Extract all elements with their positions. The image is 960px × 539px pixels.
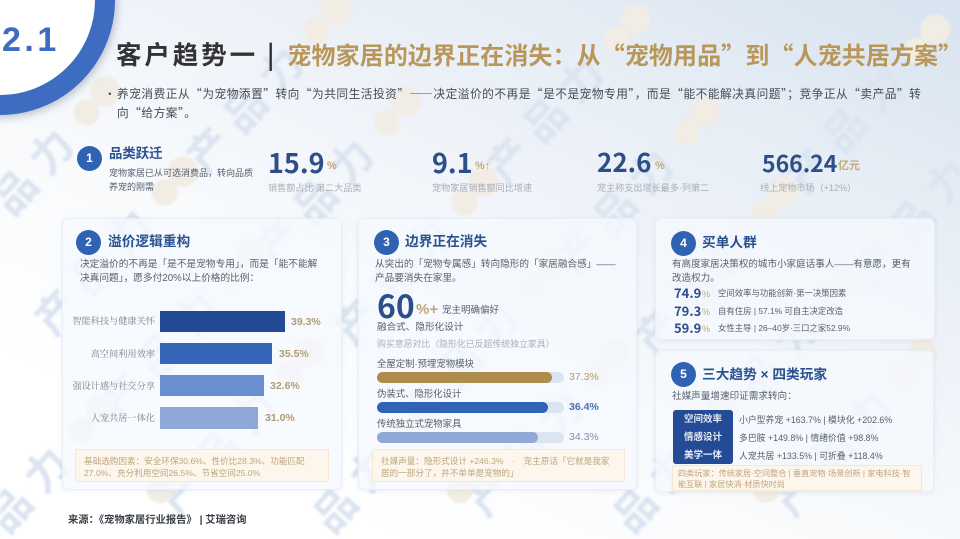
panel 2: premium logic (62, 218, 342, 490)
badge 2: 2 (85, 235, 92, 249)
callout 2 (75, 449, 329, 482)
description 4 (672, 258, 911, 284)
description 1: 养宠的刚需 (109, 182, 154, 192)
buyer stats: 79.3 (674, 301, 701, 320)
source note: 来源：《宠物家居行业报告》 | 艾瑞咨询 (68, 515, 246, 526)
buyer stats: % (702, 324, 710, 334)
heading 2: 溢价逻辑重构 (108, 234, 190, 249)
heading 3: 边界正在消失 (405, 234, 487, 249)
description 4: 有高度家居决策权的城市小家庭话事人——有意愿，更有 (672, 259, 911, 270)
callout 3 (372, 449, 625, 482)
intro bullet text: 养宠消费正从“为宠物添置”转向“为共同生活投资”——决定溢价的不再是“是不是宠物专用”，而是“能不能解决真问题”；竞争正从“卖产品”转 (117, 85, 921, 102)
stat 22.6%: 22.6 (597, 143, 651, 180)
badge 1 (77, 146, 102, 171)
bar chart: 39.3% (291, 316, 321, 328)
bar chart: 高空间利用效率 (91, 349, 155, 359)
watermark pattern: 产品力 (143, 366, 297, 527)
trend table (673, 410, 892, 464)
description 3: 产品要消失在家里。 (375, 273, 462, 284)
stat 15.9%: % (327, 160, 337, 172)
caption 3: 购买意愿对比（隐形化已反超传统独立家具） (377, 339, 554, 349)
stat 9.1%: %↑ (475, 160, 490, 172)
callout 3: 居的一部分了，并不单单是宠物的」 (381, 468, 519, 478)
trend table: 多巴胺 +149.8% | 情绪价值 +98.8% (739, 433, 878, 443)
description 4: 改造权力。 (672, 273, 720, 284)
big stat 60%: 60 (377, 282, 415, 328)
description 1: 宠物家居已从可选消费品，转向品质 (109, 168, 253, 178)
stat 9.1% (432, 142, 532, 193)
stat 22.6%: % (655, 160, 665, 172)
stat 15.9% (268, 142, 361, 193)
bar chart: 31.0% (265, 412, 295, 424)
buyer stats: 空间效率与功能创新·第一决策因素 (718, 288, 846, 298)
callout 5 (672, 465, 922, 491)
progress bars: 34.3% (569, 431, 599, 443)
panel 5: trends and players (655, 350, 934, 492)
bar chart: 32.6% (270, 380, 300, 392)
badge 4 (671, 231, 696, 256)
trend table: 人宠共居 +133.5% | 可折叠 +118.4% (739, 451, 883, 461)
title: 客户趋势一 | 宠物家居的边界正在消失：从“宠物用品”到“人宠共居方案” (116, 35, 960, 72)
section number: 2.1 (2, 21, 60, 59)
bar chart: 强设计感与社交分享 (72, 381, 155, 391)
callout 5: 能互联 | 家居快消·材质快时尚 (678, 480, 785, 489)
badge 1: 1 (86, 151, 93, 165)
description 2: 决定溢价的不再是「是不是宠物专用」，而是「能不能解 (80, 259, 317, 270)
watermark pattern: 产品力 (85, 268, 239, 429)
buyer stats: 59.9 (674, 318, 701, 337)
big stat 60%: 宠主明确偏好 (442, 305, 499, 316)
watermark pattern: 产品力 (450, 366, 604, 527)
badge 4: 4 (680, 236, 687, 250)
progress bars: 传统独立式宠物家具 (377, 418, 461, 429)
watermark pattern: 产品力 (385, 278, 539, 439)
callout 2: 基础选购因素：安全环保30.6%、性价比28.3%、功能匹配 (84, 456, 305, 466)
buyer stats: % (702, 289, 710, 299)
callout 5: 四类玩家：传统家居·空间整合 | 垂直宠物·场景创新 | 家电科技·智 (678, 469, 911, 478)
watermark pattern: 产品力 (470, 33, 624, 194)
watermark pattern: 产品力 (770, 43, 924, 204)
progress bars: 37.3% (569, 371, 599, 383)
description 2: 决真问题」，愿多付20%以上价格的比例： (80, 273, 259, 284)
bar chart: 人宠共居一体化 (91, 413, 155, 423)
big stat 60%: %+ (416, 301, 438, 318)
trend table: 小户型养宠 +163.7% | 模块化 +202.6% (739, 415, 892, 425)
stat 9.1%: 9.1 (432, 142, 473, 181)
panel 3: boundary vanishing (358, 218, 637, 490)
watermark pattern: 产品力 (170, 23, 324, 184)
stat 566.24: 566.24 (762, 145, 837, 179)
watermark pattern: 产品力 (757, 366, 911, 527)
bar chart (72, 311, 321, 429)
description 2 (80, 258, 317, 284)
big stat 60% (377, 282, 499, 328)
intro bullet text (104, 85, 921, 121)
callout 2: 27.0%、充分利用空间26.5%、节省空间25.0% (84, 468, 260, 478)
callout 3: 社媒声量：隐形式设计 +246.3% · 宠主原话「它就是我家 (381, 456, 609, 466)
badge 2 (76, 230, 101, 255)
bar chart: 智能科技与健康关怀 (72, 316, 155, 326)
badge 3: 3 (383, 235, 390, 249)
stat 15.9%: 销售额占比 第二大品类 (268, 183, 361, 193)
sub text 3: 融合式、隐形化设计 (377, 322, 463, 333)
buyer stats: 74.9 (674, 283, 701, 302)
watermark pattern: 产品力 (618, 205, 772, 366)
badge 5: 5 (680, 367, 687, 381)
badge 5 (671, 362, 696, 387)
heading 5: 三大趋势 × 四类玩家 (702, 367, 827, 382)
stat 566.24 (760, 145, 860, 193)
panel 1: category shift (77, 142, 860, 193)
watermark pattern: 产品力 (540, 125, 694, 286)
stat 22.6% (597, 143, 709, 193)
stat 22.6%: 宠主称支出增长最多·列第二 (597, 183, 709, 193)
watermark pattern: 产品力 (318, 195, 472, 356)
buyer stats (674, 283, 850, 337)
progress bars: 36.4% (569, 401, 599, 413)
watermark pattern: 产品力 (240, 115, 394, 276)
badge 3 (374, 230, 399, 255)
stat 15.9%: 15.9 (268, 142, 325, 181)
description 3 (375, 258, 616, 284)
progress bars (377, 358, 599, 443)
progress bars: 全屋定制·预埋宠物模块 (377, 358, 474, 369)
stat 566.24: 亿元 (838, 160, 860, 172)
description 1 (109, 168, 253, 192)
stat 9.1%: 宠物家居销售额同比增速 (432, 183, 532, 193)
trend table: 美学一体 (684, 450, 722, 461)
trend table: 情感设计 (684, 432, 722, 443)
intro bullet text: 向“给方案”。 (117, 104, 196, 121)
trend table: 空间效率 (684, 414, 722, 425)
heading 1: 品类跃迁 (109, 146, 163, 161)
buyer stats: % (702, 307, 710, 317)
description 5: 社媒声量增速印证需求转向： (672, 391, 797, 402)
intro bullet text: • (104, 85, 116, 102)
heading 4: 买单人群 (702, 235, 757, 250)
stat 566.24: 线上宠物市场（+12%） (760, 183, 856, 193)
section number ring (0, 0, 115, 115)
description 3: 从突出的「宠物专属感」转向隐形的「家居融合感」—— (375, 259, 616, 270)
buyer stats: 自有住房 | 57.1% 可自主决定改造 (718, 306, 843, 316)
panel 4: buyers (655, 218, 935, 340)
watermark pattern: 产品力 (18, 185, 172, 346)
buyer stats: 女性主导 | 26–40岁·三口之家52.9% (718, 323, 850, 333)
bar chart: 35.5% (279, 348, 309, 360)
watermark pattern: 产品力 (685, 288, 839, 449)
progress bars: 伪装式、隐形化设计 (377, 388, 461, 399)
